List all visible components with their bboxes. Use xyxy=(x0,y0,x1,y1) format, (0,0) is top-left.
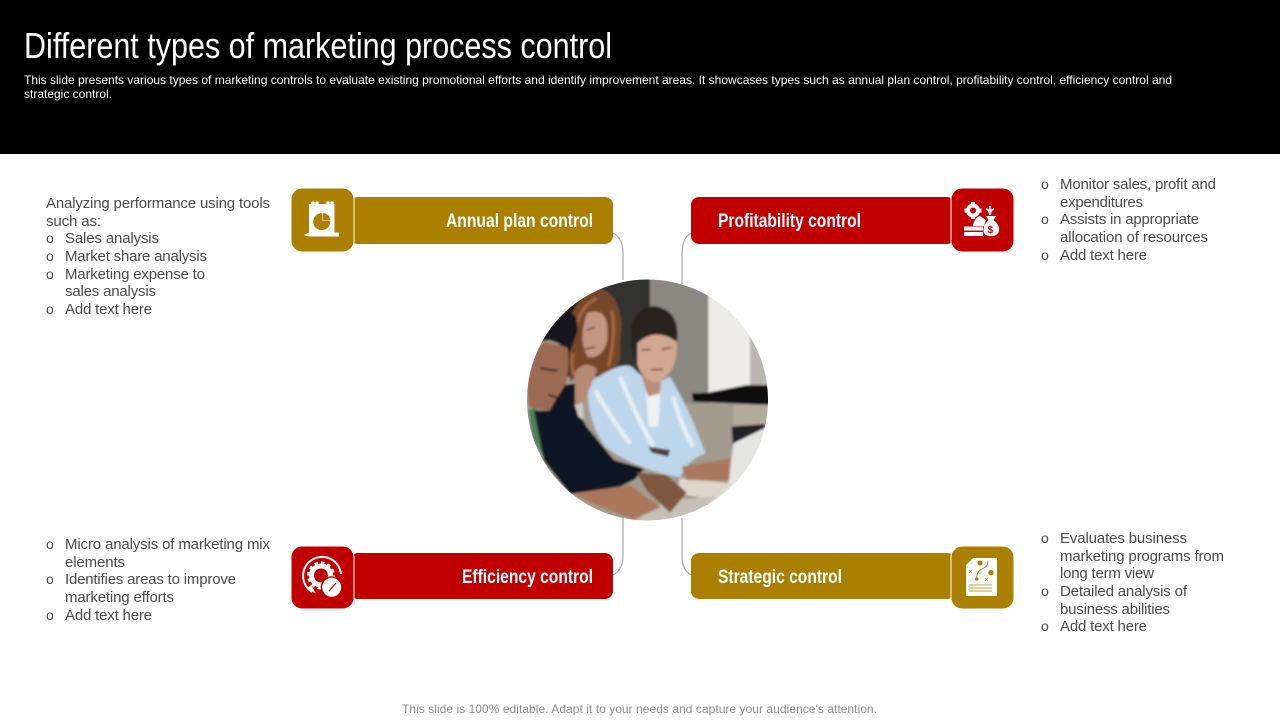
icon: gear and money bag: $ xyxy=(988,225,994,236)
text block: efficiency control: elements xyxy=(65,554,125,571)
hand on chin xyxy=(575,365,597,407)
third woman shirt xyxy=(588,366,705,477)
icon: gear with gauge xyxy=(303,557,343,598)
text block: annual plan control: o xyxy=(46,248,54,264)
text block: profitability control: o xyxy=(1041,247,1049,263)
text block: profitability control: o xyxy=(1041,176,1049,192)
text block: annual plan control: such as: xyxy=(46,213,101,230)
text block: annual plan control: Add text here xyxy=(65,301,152,318)
text block: profitability control: Assists in appropriate xyxy=(1060,211,1199,228)
text block: annual plan control: o xyxy=(46,266,54,282)
title: Different types of marketing process control xyxy=(24,25,612,66)
header band xyxy=(0,0,1280,154)
card: strategic control: Strategic control xyxy=(718,567,842,588)
text block: efficiency control: o xyxy=(46,607,54,623)
text block: strategic control xyxy=(1041,530,1224,635)
text block: efficiency control: marketing efforts xyxy=(65,589,174,606)
icon: calendar pie xyxy=(304,201,339,236)
text block: strategic control: business abilities xyxy=(1060,601,1170,618)
text block: efficiency control: Micro analysis of marketing mix xyxy=(65,536,270,553)
center photo xyxy=(527,280,768,520)
hands xyxy=(637,473,687,513)
card: strategic control xyxy=(691,546,1014,609)
text block: strategic control: Detailed analysis of xyxy=(1060,583,1188,600)
text block: strategic control: long term view xyxy=(1060,565,1154,582)
text block: annual plan control: o xyxy=(46,230,54,246)
text block: annual plan control: Market share analysis xyxy=(65,248,207,265)
text block: strategic control: o xyxy=(1041,530,1049,546)
text block: strategic control: Add text here xyxy=(1060,618,1147,635)
card: annual plan control xyxy=(291,188,613,252)
card: efficiency control xyxy=(291,546,613,609)
text block: profitability control: o xyxy=(1041,211,1049,227)
text block: efficiency control xyxy=(46,536,270,624)
text block: efficiency control: o xyxy=(46,571,54,587)
text block: annual plan control: o xyxy=(46,301,54,317)
card: annual plan control: Annual plan control xyxy=(446,211,593,232)
card: efficiency control: Efficiency control xyxy=(462,567,593,588)
icon: strategy document xyxy=(966,558,997,596)
icon: gear and money bag xyxy=(964,202,999,236)
text block: strategic control: o xyxy=(1041,618,1049,634)
text block: annual plan control xyxy=(46,195,270,318)
text block: profitability control: allocation of resources xyxy=(1060,229,1208,246)
text block: annual plan control: Analyzing performance using tools xyxy=(46,195,270,212)
text block: strategic control: Evaluates business xyxy=(1060,530,1187,547)
text block: annual plan control: Marketing expense to xyxy=(65,266,205,283)
text block: efficiency control: Add text here xyxy=(65,607,152,624)
subtitle xyxy=(24,73,1172,101)
subtitle: strategic control. xyxy=(24,87,112,101)
laptop and table xyxy=(727,426,765,486)
text block: efficiency control: Identifies areas to improve xyxy=(65,571,236,588)
text block: annual plan control: sales analysis xyxy=(65,283,156,300)
card: profitability control xyxy=(691,188,1014,252)
text block: annual plan control: Sales analysis xyxy=(65,230,159,247)
man xyxy=(541,312,578,352)
text block: strategic control: o xyxy=(1041,583,1049,599)
text block: profitability control xyxy=(1041,176,1216,264)
subtitle: This slide presents various types of marketing controls to evaluate existing promotional efforts and identify improvement areas. It showcases types such as annual plan control, profitability control, efficiency control and xyxy=(24,73,1172,87)
third woman head xyxy=(642,377,662,397)
text block: profitability control: Monitor sales, profit and xyxy=(1060,176,1216,193)
text block: profitability control: Add text here xyxy=(1060,247,1147,264)
text block: efficiency control: o xyxy=(46,536,54,552)
text block: profitability control: expenditures xyxy=(1060,194,1143,211)
red-haired woman xyxy=(564,301,579,314)
card: profitability control: Profitability control xyxy=(718,211,861,232)
connector lines xyxy=(613,233,691,575)
text block: strategic control: marketing programs from xyxy=(1060,548,1224,565)
footer note: This slide is 100% editable. Adapt it to your needs and capture your audience's attention. xyxy=(402,702,877,716)
